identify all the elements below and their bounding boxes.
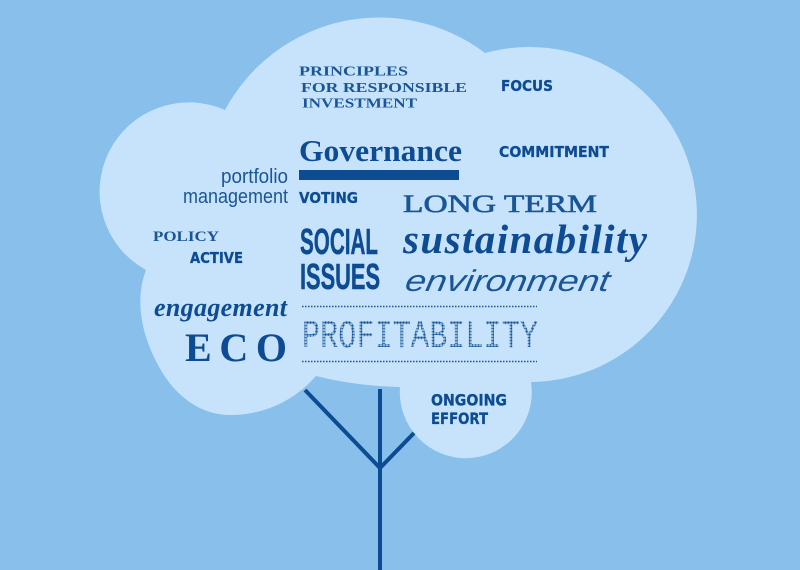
word: portfolio management: portfolio: [221, 166, 288, 188]
word: policy: POLICY: [153, 229, 220, 245]
cloud: [100, 17, 697, 458]
word: profitability with dotted rules: PROFITABILITY: [302, 315, 538, 359]
word: environment: environment: [403, 265, 615, 298]
word: governance with bar: Governance: [299, 133, 462, 168]
word: portfolio management: [183, 166, 288, 208]
word: commitment: COMMITMENT: [499, 143, 609, 161]
text block: Principles for Responsible Investment: FOR RESPONSIBLE: [301, 81, 467, 96]
word: portfolio management: management: [183, 186, 288, 208]
word: social issues: [300, 221, 380, 297]
word: engagement: engagement: [154, 293, 288, 322]
text block: Principles for Responsible Investment: PRINCIPLES: [299, 64, 408, 80]
word: active: ACTIVE: [190, 249, 243, 267]
word: social issues: SOCIAL: [300, 221, 378, 262]
word: long term: LONG TERM: [403, 189, 597, 218]
text block: Principles for Responsible Investment: [299, 64, 467, 112]
word: ongoing effort: ONGOING: [431, 390, 507, 410]
tree trunk and branches: [305, 389, 414, 570]
word: profitability with dotted rules: [302, 306, 538, 362]
word: ongoing effort: EFFORT: [431, 409, 488, 428]
word: social issues: ISSUES: [300, 256, 380, 297]
text block: Principles for Responsible Investment: INVESTMENT: [302, 96, 418, 112]
word: voting: VOTING: [299, 189, 358, 207]
word: ongoing effort: [431, 390, 507, 428]
word: sustainability: sustainability: [402, 216, 648, 262]
word: focus: FOCUS: [501, 77, 553, 95]
word: eco: ECO: [185, 325, 287, 370]
